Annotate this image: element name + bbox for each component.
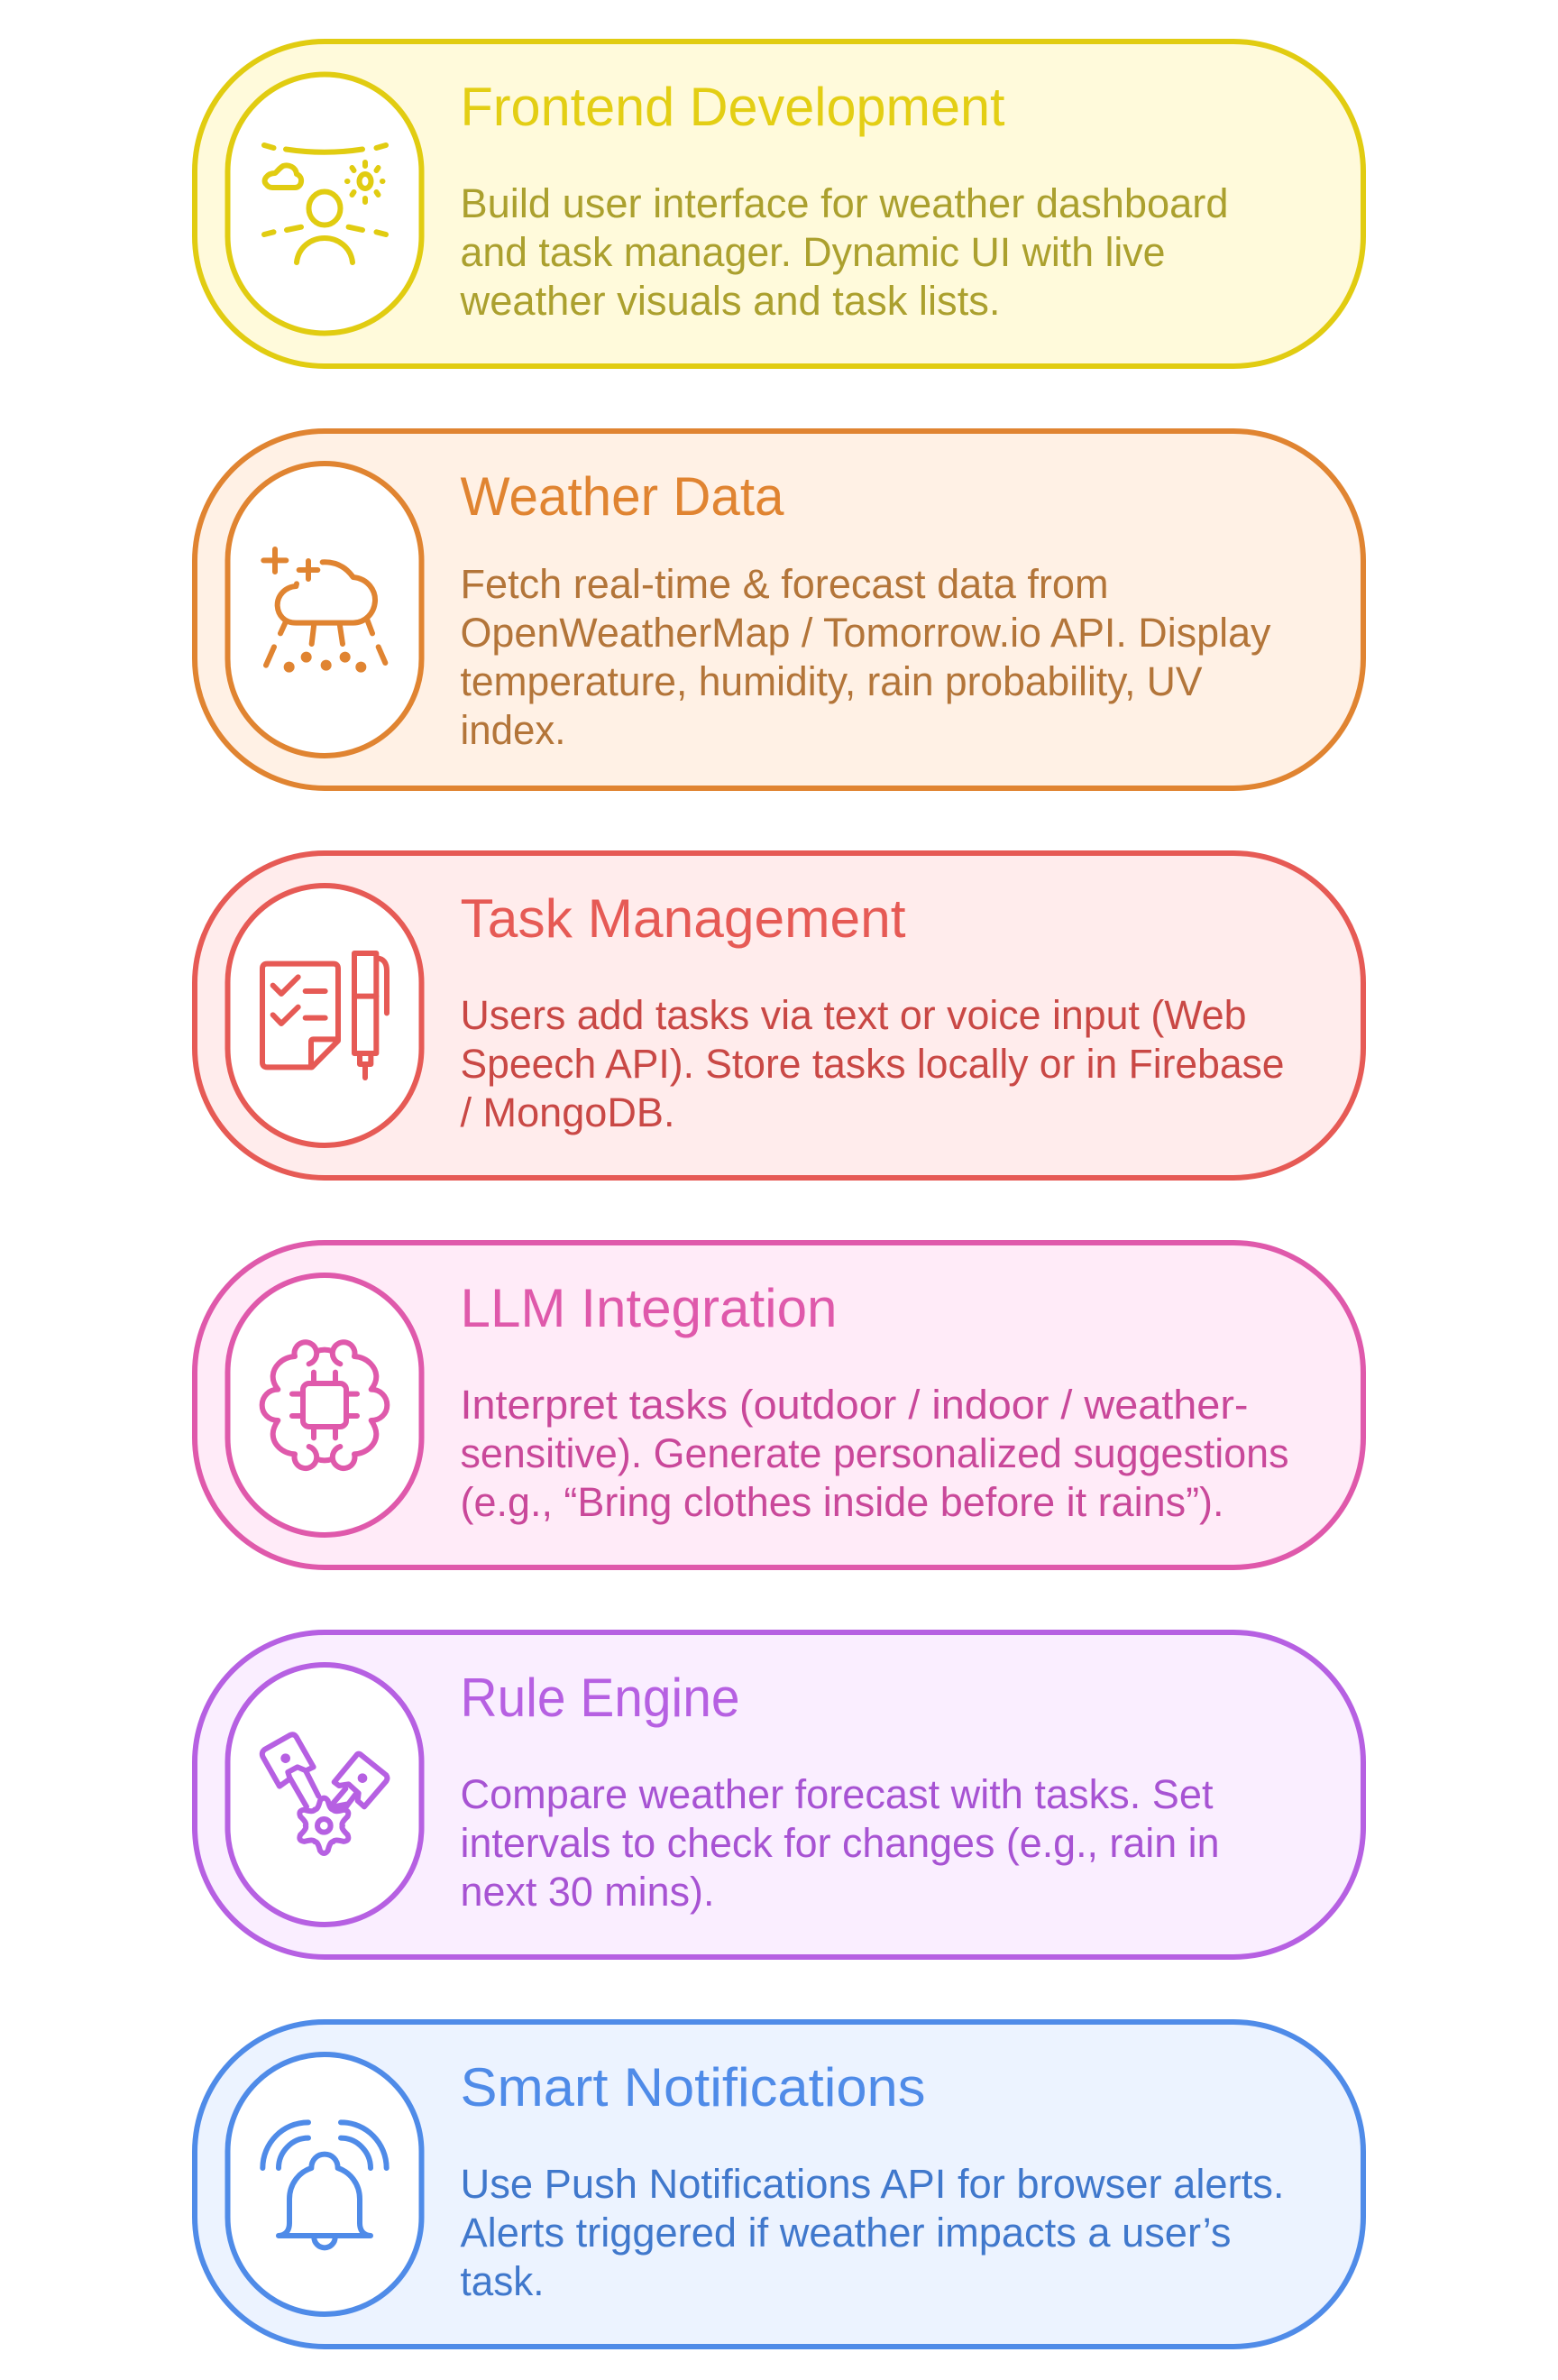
description: Rule Engine: intervals to check for changes (e.g., rain in <box>460 1820 1219 1866</box>
description: Smart Notifications: Alerts triggered if weather impacts a user’s <box>460 2210 1232 2256</box>
description: Weather Data: OpenWeatherMap / Tomorrow.io API. Display <box>460 610 1271 656</box>
description: Smart Notifications <box>460 2161 1284 2304</box>
panel: LLM Integration <box>195 1243 1363 1567</box>
title: Weather Data: Weather Data <box>460 466 784 527</box>
description: Task Management: / MongoDB. <box>460 1089 674 1135</box>
icon: user with weather <box>264 145 386 262</box>
description: Task Management <box>460 992 1284 1135</box>
icon: rain cloud <box>263 549 385 673</box>
title: LLM Integration: LLM Integration <box>460 1278 837 1338</box>
title: Smart Notifications: Smart Notifications <box>460 2057 925 2118</box>
description: Rule Engine <box>460 1771 1219 1915</box>
description: Frontend Development: weather visuals and task lists. <box>459 278 1001 324</box>
title: Rule Engine: Rule Engine <box>460 1668 739 1728</box>
description: Weather Data: temperature, humidity, rain probability, UV <box>460 658 1203 704</box>
description: Weather Data <box>460 561 1271 753</box>
description: LLM Integration: Interpret tasks (outdoor / indoor / weather- <box>460 1382 1248 1428</box>
icon: pistons and gear <box>262 1734 387 1853</box>
panel: Weather Data <box>195 431 1363 788</box>
title: Frontend Development: Frontend Development <box>460 77 1005 137</box>
description: LLM Integration: (e.g., “Bring clothes inside before it rains”). <box>460 1479 1224 1525</box>
description: Rule Engine: next 30 mins). <box>460 1869 714 1915</box>
description: LLM Integration <box>460 1382 1289 1525</box>
description: Weather Data: Fetch real-time & forecast data from <box>460 561 1109 607</box>
panel: Smart Notifications <box>195 2022 1363 2347</box>
icon: checklist and pen <box>262 953 387 1078</box>
description: Task Management: Users add tasks via text or voice input (Web <box>460 992 1246 1038</box>
description: Task Management: Speech API). Store tasks locally or in Firebase <box>460 1041 1284 1087</box>
description: Rule Engine: Compare weather forecast with tasks. Set <box>460 1771 1214 1817</box>
description: Smart Notifications: task. <box>460 2258 545 2304</box>
description: LLM Integration: sensitive). Generate personalized suggestions <box>460 1430 1289 1476</box>
description: Weather Data: index. <box>460 707 566 753</box>
panel: Task Management <box>195 853 1363 1178</box>
icon: brain chip <box>262 1342 387 1468</box>
panel: Frontend Development <box>195 41 1363 366</box>
description: Frontend Development: and task manager. Dynamic UI with live <box>460 229 1165 275</box>
title: Task Management: Task Management <box>460 888 906 949</box>
panel: Rule Engine <box>195 1632 1363 1957</box>
description: Frontend Development: Build user interface for weather dashboard <box>460 180 1228 226</box>
description: Smart Notifications: Use Push Notifications API for browser alerts. <box>460 2161 1284 2207</box>
icon: ringing bell <box>262 2122 387 2247</box>
description: Frontend Development <box>459 180 1228 324</box>
